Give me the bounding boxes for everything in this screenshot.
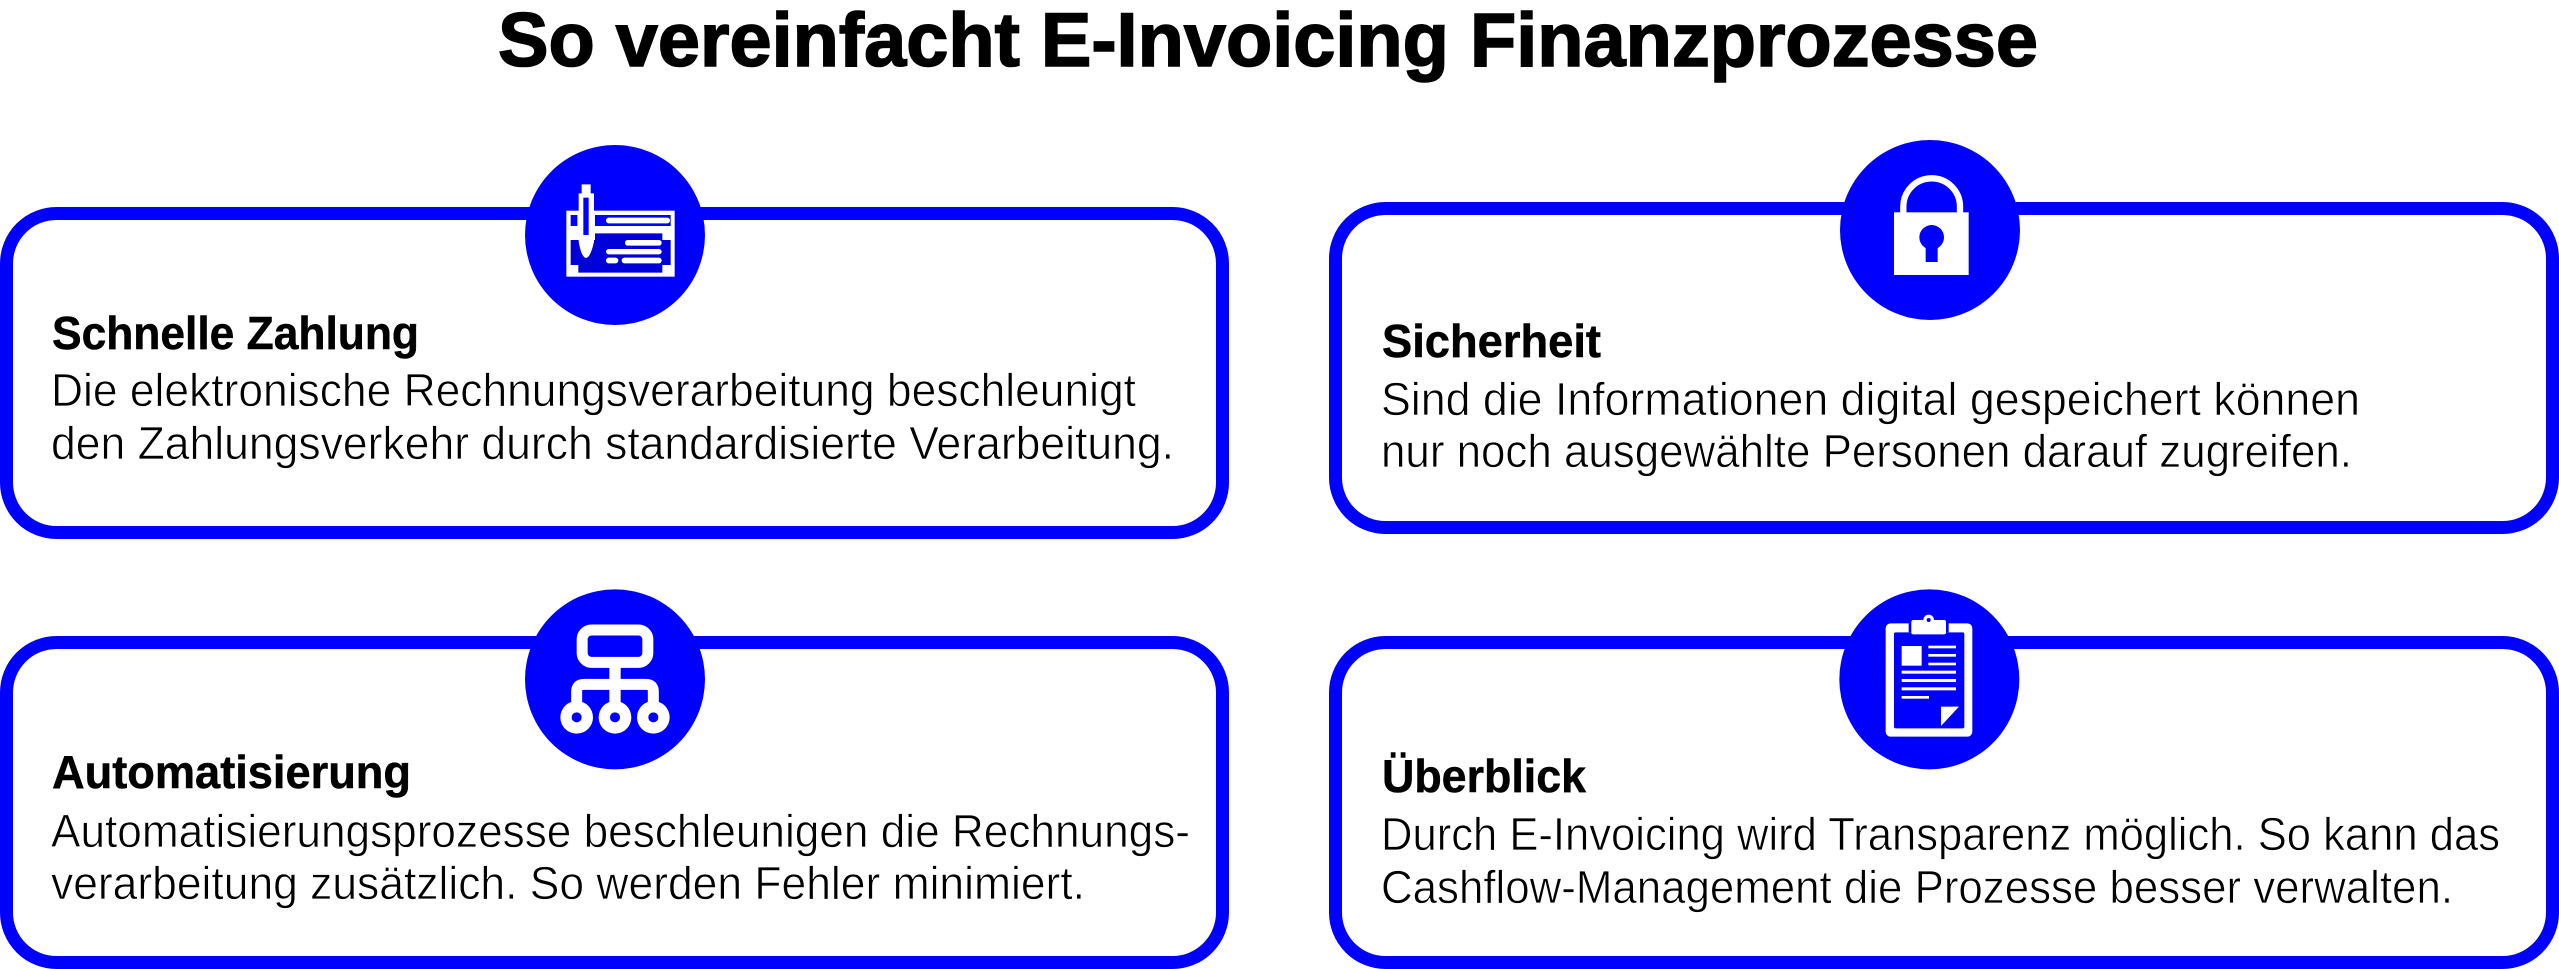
- panel: Schnelle Zahlung: [6, 145, 1222, 532]
- body text: [1381, 808, 2500, 913]
- icon: process flow chart: [525, 589, 705, 769]
- body text: Durch E-Invoicing wird Transparenz möglich. So kann das: [1381, 808, 2500, 860]
- panel outline: [1336, 642, 2552, 962]
- heading: Schnelle Zahlung: [52, 307, 419, 359]
- panel: Automatisierung: [6, 589, 1222, 962]
- title: So vereinfacht E-Invoicing Finanzprozesse: [498, 0, 2038, 83]
- icon: padlock: [1840, 140, 2020, 320]
- body text: [51, 364, 1174, 469]
- body text: den Zahlungsverkehr durch standardisierte Verarbeitung.: [51, 417, 1174, 469]
- body text: verarbeitung zusätzlich. So werden Fehler minimiert.: [51, 857, 1085, 909]
- icon: check and pen: [525, 145, 705, 325]
- body text: Cashflow-Management die Prozesse besser verwalten.: [1381, 861, 2453, 913]
- heading: Überblick: [1382, 750, 1586, 802]
- icon: clipboard: [1839, 589, 2019, 769]
- body text: Automatisierungsprozesse beschleunigen die Rechnungs-: [51, 805, 1190, 857]
- heading: Automatisierung: [52, 746, 411, 798]
- panel outline: [1336, 208, 2552, 528]
- body text: [51, 805, 1190, 909]
- panel outline: [6, 642, 1222, 962]
- panel: Überblick: [1336, 589, 2552, 962]
- body text: nur noch ausgewählte Personen darauf zugreifen.: [1381, 425, 2352, 477]
- body text: [1381, 373, 2360, 477]
- body text: Die elektronische Rechnungsverarbeitung beschleunigt: [51, 364, 1136, 416]
- panel: Sicherheit: [1336, 140, 2552, 528]
- panel outline: [6, 214, 1222, 532]
- heading: Sicherheit: [1382, 315, 1601, 367]
- body text: Sind die Informationen digital gespeichert können: [1381, 373, 2360, 425]
